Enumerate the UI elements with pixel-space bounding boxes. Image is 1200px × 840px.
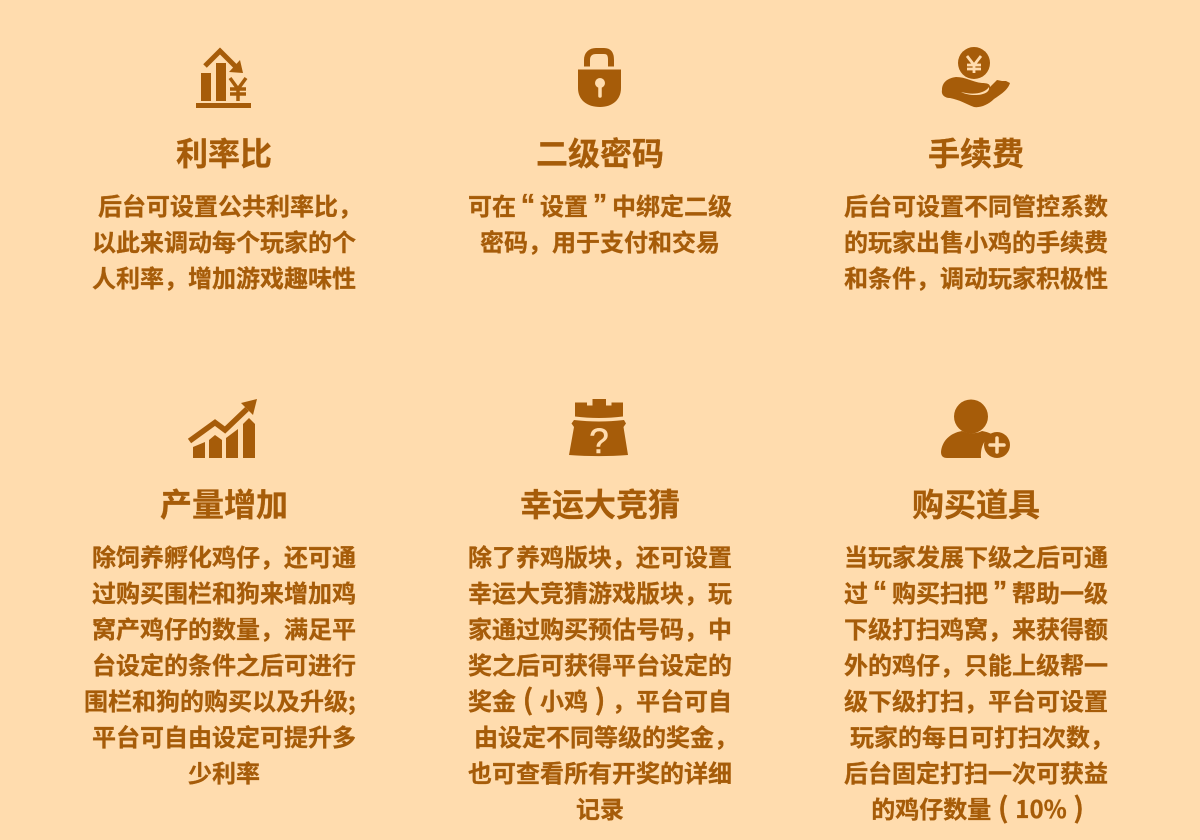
text block: 围栏和狗的购买以及升级	[84, 682, 348, 717]
text block: 和条件，调动玩家积极性	[844, 259, 1108, 294]
text block: (	[523, 679, 533, 719]
text block: (	[998, 787, 1009, 827]
icon: padlock	[578, 48, 621, 107]
text block: 当玩家发展下级之后可通	[844, 538, 1108, 573]
text block: 窝产鸡仔的数量，满足平	[92, 610, 356, 645]
heading: 幸运大竞猜	[520, 480, 680, 526]
panel: 手续费	[844, 47, 1108, 294]
text block: ，	[338, 187, 362, 222]
text block: 台设定的条件之后可进行	[92, 646, 356, 681]
text block: 密码，用于支付和交易	[480, 223, 720, 258]
text block: 也可查看所有开奖的详细	[468, 754, 732, 789]
panel: 二级密码	[468, 48, 732, 258]
text block: 级下级打扫，平台可设置	[844, 682, 1108, 717]
text block: ，	[1090, 718, 1114, 753]
text block	[92, 187, 362, 294]
text block: 后台固定打扫一次可获益	[844, 754, 1108, 789]
heading: 利率比	[176, 129, 272, 175]
text block	[844, 538, 1114, 827]
heading: 二级密码	[536, 129, 664, 175]
text block	[468, 187, 732, 258]
text block: 少利率	[188, 754, 260, 789]
heading: 手续费	[928, 129, 1024, 175]
text block: 后台可设置公共利率比	[98, 187, 338, 222]
text block: )	[595, 679, 605, 719]
text block: 后台可设置不同管控系数	[844, 187, 1108, 222]
text block: ;	[348, 682, 356, 717]
text block: “	[521, 189, 535, 221]
text block: ”	[993, 576, 1007, 608]
panel: 购买道具	[844, 400, 1114, 827]
text block: 奖金 小鸡 ，平台可自	[468, 682, 732, 717]
panel: 利率比	[92, 48, 362, 294]
icon: add user	[941, 400, 1010, 458]
icon: hand holding yen coin	[942, 47, 1010, 108]
text block: 除了养鸡版块，还可设置	[468, 538, 732, 573]
text block: 可在 设置 中绑定二级	[468, 187, 732, 222]
text block	[844, 187, 1108, 294]
text block: 除饲养孵化鸡仔，还可通	[92, 538, 356, 573]
text block: 家通过购买预估号码，中	[468, 610, 732, 645]
icon: mystery bag	[569, 399, 628, 461]
icon: mystery bag: ?	[589, 422, 609, 461]
heading: 购买道具	[912, 480, 1040, 526]
text block: ”	[593, 189, 607, 221]
text block: 奖之后可获得平台设定的	[468, 646, 732, 681]
text block: 幸运大竞猜游戏版块，玩	[468, 574, 732, 609]
text block	[84, 538, 356, 789]
text block: 玩家的每日可打扫次数	[850, 718, 1090, 753]
text block: 的玩家出售小鸡的手续费	[844, 223, 1108, 258]
text block: 记录	[576, 790, 624, 825]
text block: 过 购买扫把 帮助一级	[844, 574, 1108, 609]
text block: )	[1073, 787, 1084, 827]
text block: 以此来调动每个玩家的个	[92, 223, 356, 258]
text block: ，	[714, 718, 738, 753]
text block	[468, 538, 738, 825]
panel: 产量增加	[84, 399, 356, 789]
heading: 产量增加	[160, 480, 288, 526]
text block: 的鸡仔数量 10%	[871, 790, 1067, 825]
text block: 由设定不同等级的奖金	[474, 718, 714, 753]
text block: 平台可自由设定可提升多	[92, 718, 356, 753]
text block: 外的鸡仔，只能上级帮一	[844, 646, 1108, 681]
icon: chart with yen	[196, 48, 251, 108]
text block: 过购买围栏和狗来增加鸡	[92, 574, 356, 609]
icon: rising bar chart	[188, 399, 257, 458]
panel: 幸运大竞猜	[468, 399, 738, 825]
text block: 下级打扫鸡窝，来获得额	[844, 610, 1108, 645]
text block: “	[873, 576, 887, 608]
text block: 人利率，增加游戏趣味性	[92, 259, 356, 294]
